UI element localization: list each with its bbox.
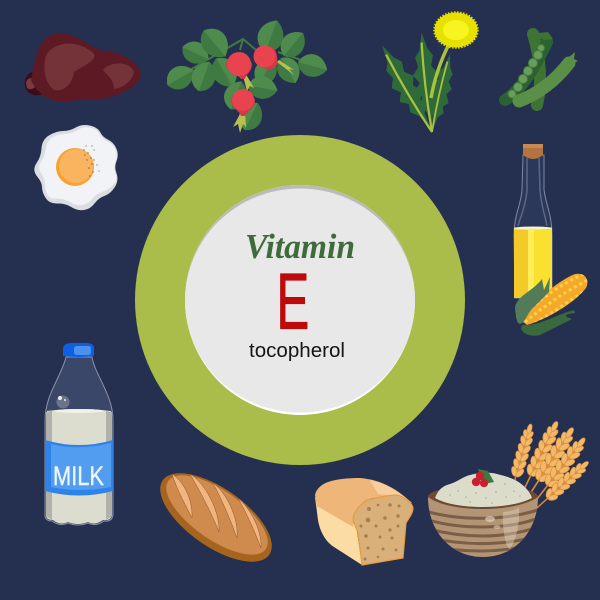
icon: bread loaf (315, 478, 413, 565)
icon: corn (515, 274, 590, 336)
icon: wheat (504, 418, 593, 515)
icon: peas (505, 28, 578, 105)
icon: liver (25, 33, 141, 102)
letter E: E (276, 258, 309, 345)
cap (63, 343, 94, 357)
label text: MILK (53, 461, 104, 491)
icon: porridge bowl (425, 469, 541, 557)
icon: oil bottle (514, 144, 552, 298)
plate (135, 135, 465, 465)
porridge (435, 473, 532, 507)
subtitle: tocopherol: tocopherol (249, 340, 345, 362)
title: Vitamin: Vitamin (245, 227, 355, 266)
icon: milk bottle (45, 343, 113, 525)
icon: dandelion (371, 12, 478, 138)
leaves (162, 16, 330, 135)
icon: rose hip branch (162, 16, 330, 135)
berries (472, 469, 494, 487)
rose hips (226, 46, 294, 133)
cork (523, 144, 543, 159)
icon: fried egg (35, 126, 117, 209)
highlight bubble (56, 396, 70, 408)
label (45, 440, 113, 496)
bowl body (425, 497, 541, 557)
icon: baguette (146, 456, 286, 579)
